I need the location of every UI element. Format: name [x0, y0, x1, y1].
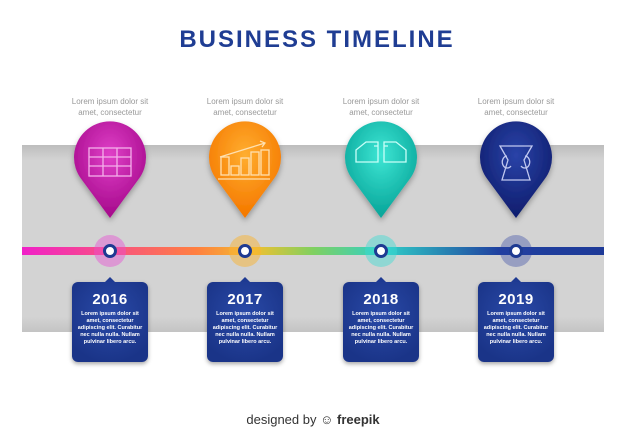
halo 4: [500, 235, 532, 267]
dot 2: [238, 244, 252, 258]
dot 4: [509, 244, 523, 258]
box 2018: [343, 282, 419, 362]
box 2019: [478, 282, 554, 362]
halo 3: [365, 235, 397, 267]
box 2017: [207, 282, 283, 362]
pin 1: [74, 121, 146, 218]
box 2018: 2018: [363, 291, 399, 308]
footer: designed by ☺ freepik: [246, 412, 380, 427]
pin 2: [209, 121, 281, 218]
pin 4: [480, 121, 552, 218]
dot 1: [103, 244, 117, 258]
box 2019: 2019: [498, 291, 534, 308]
box 2016: 2016: [92, 291, 128, 308]
box 2017: 2017: [227, 291, 263, 308]
caption 2: Lorem ipsum dolor sit amet, consectetur: [207, 97, 283, 117]
box 2017: Lorem ipsum dolor sit amet, consectetur adipiscing elit. Curabitur nec nulla nulla. Nullam pulvinar libero arcu.: [213, 311, 277, 345]
box 2019: Lorem ipsum dolor sit amet, consectetur adipiscing elit. Curabitur nec nulla nulla. Nullam pulvinar libero arcu.: [484, 311, 548, 345]
timeline line: [22, 247, 604, 255]
halo 2: [229, 235, 261, 267]
gray band: [22, 145, 604, 332]
box 2016: [72, 282, 148, 362]
halos: [94, 235, 126, 267]
dot 3: [374, 244, 388, 258]
box 2018: Lorem ipsum dolor sit amet, consectetur adipiscing elit. Curabitur nec nulla nulla. Nullam pulvinar libero arcu.: [349, 311, 413, 345]
box 2016: Lorem ipsum dolor sit amet, consectetur adipiscing elit. Curabitur nec nulla nulla. Nullam pulvinar libero arcu.: [78, 311, 142, 345]
captions: Lorem ipsum dolor sit amet, consectetur: [72, 97, 148, 117]
pin 3: [345, 121, 417, 218]
title: BUSINESS TIMELINE: [179, 26, 455, 53]
caption 4: Lorem ipsum dolor sit amet, consectetur: [478, 97, 554, 117]
caption 3: Lorem ipsum dolor sit amet, consectetur: [343, 97, 419, 117]
